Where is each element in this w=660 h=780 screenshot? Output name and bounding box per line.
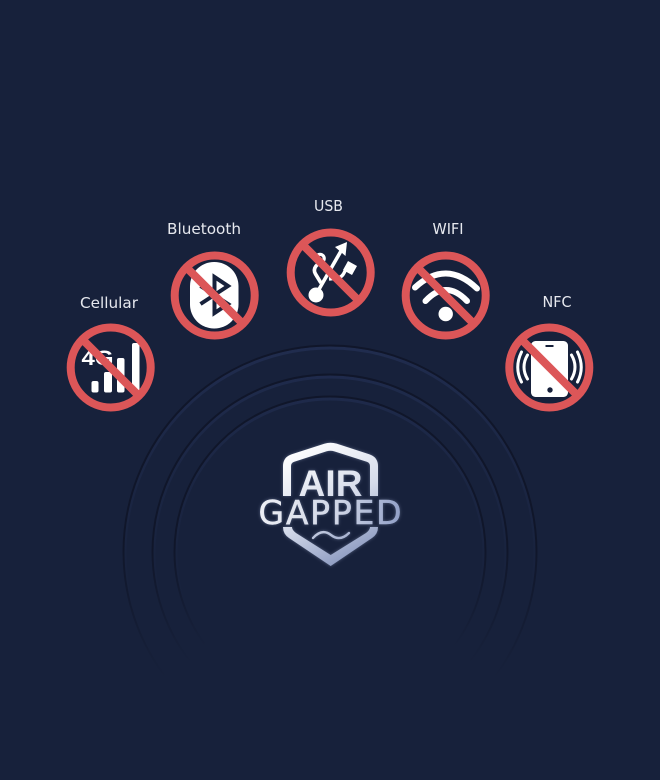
text: GAPPED: GAPPED (258, 493, 402, 532)
icon: nfc prohibited (509, 328, 589, 408)
icon: wifi prohibited (406, 256, 486, 336)
icon: bluetooth prohibited (175, 256, 255, 336)
icon: cellular prohibited (71, 328, 151, 408)
wave mark (313, 532, 349, 538)
label: USB: USB (314, 197, 343, 215)
label: WIFI: WIFI (432, 220, 464, 238)
icon: usb prohibited (291, 232, 371, 312)
logo: air gapped shield (258, 447, 402, 566)
label: NFC: NFC (542, 293, 572, 311)
concentric rings (124, 346, 536, 758)
shield upper outline (287, 447, 374, 496)
ring bottom mask (100, 680, 560, 740)
text: AIR: AIR (298, 463, 362, 504)
icon: cellular prohibited: 4G (82, 347, 114, 370)
label: Cellular: Cellular (80, 294, 139, 312)
label: Bluetooth: Bluetooth (167, 220, 241, 238)
shield lower band (283, 527, 378, 566)
